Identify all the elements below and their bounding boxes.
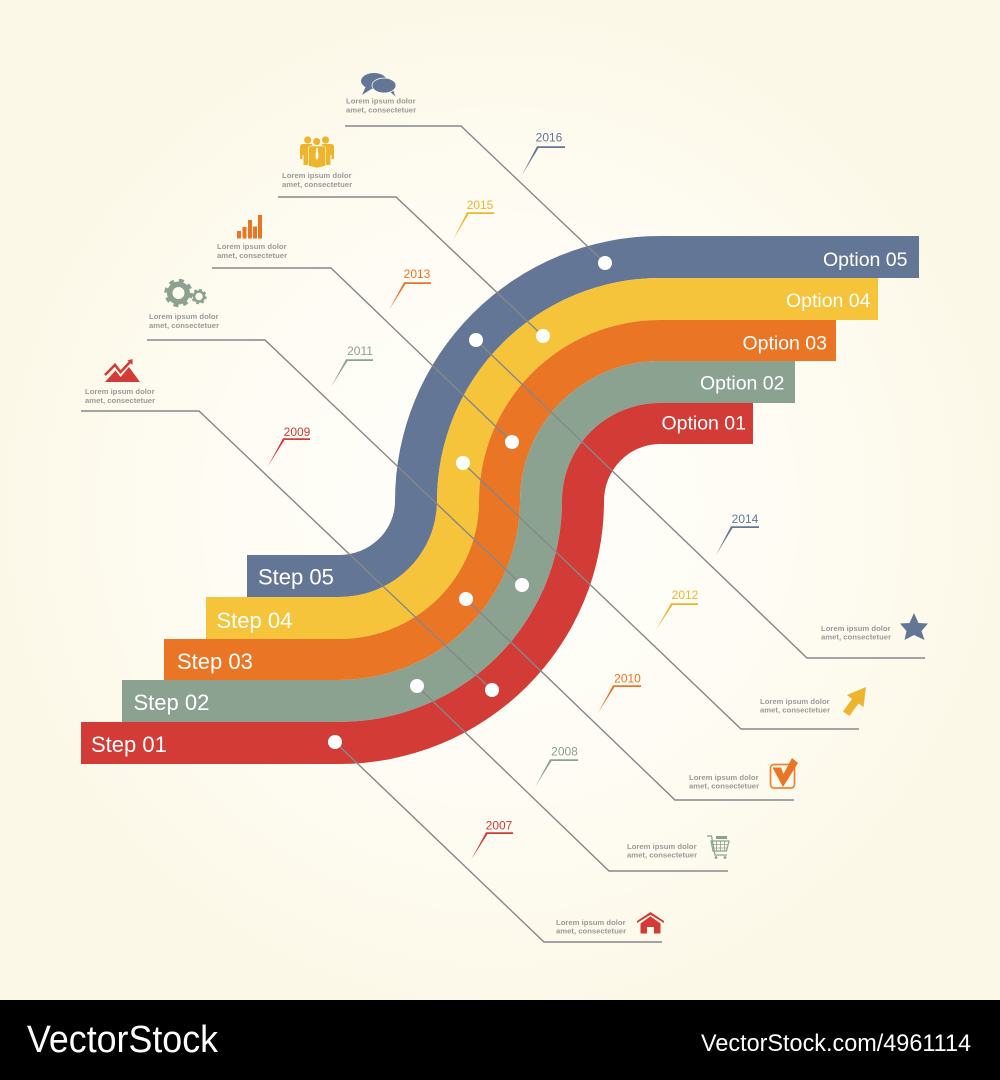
caption: checkbox: Lorem ipsum dolor <box>689 773 759 782</box>
caption: shopping cart: amet, consectetuer <box>627 851 697 860</box>
footer bar <box>0 1000 1000 1080</box>
caption: team: amet, consectetuer <box>282 180 352 189</box>
step labels: Step 02 <box>134 690 209 715</box>
ribbon: step 01 to option 01 <box>81 403 753 764</box>
year flag: 2015: 2015 <box>467 198 494 212</box>
year flag: 2011: 2011 <box>347 344 373 358</box>
year flag: 2007: 2007 <box>486 818 513 832</box>
caption: speech bubbles: amet, consectetuer <box>346 105 416 114</box>
caption: mountain trend: amet, consectetuer <box>85 396 155 405</box>
icon: shopping cart <box>707 836 729 859</box>
leader lines <box>81 126 925 942</box>
ribbon: step 04 to option 04 <box>206 278 878 639</box>
caption: bar chart: Lorem ipsum dolor <box>217 242 287 251</box>
footer brand: VectorStock <box>27 1019 219 1061</box>
caption: checkbox: amet, consectetuer <box>689 782 759 791</box>
year flag: 2008: 2008 <box>551 744 578 758</box>
year flag: 2012 <box>656 588 699 630</box>
year flag: 2011 <box>331 344 373 387</box>
year flag: 2009 <box>268 425 311 466</box>
option labels: Option 03 <box>742 332 827 354</box>
caption: house: Lorem ipsum dolor <box>556 918 626 927</box>
icon: bar chart <box>237 215 262 238</box>
step labels: Step 05 <box>258 564 334 590</box>
year flag: 2013: 2013 <box>404 267 431 281</box>
icon: house <box>637 912 664 934</box>
option labels: Option 05 <box>823 249 908 271</box>
year flag: 2007 <box>471 818 513 860</box>
option labels <box>661 249 908 434</box>
caption: star: amet, consectetuer <box>821 633 891 642</box>
footer image id: VectorStock.com/4961114 <box>701 1030 971 1057</box>
icon: star <box>900 613 928 640</box>
year flag: 2012: 2012 <box>672 588 699 602</box>
caption: bar chart: amet, consectetuer <box>217 251 287 260</box>
step labels: Step 03 <box>177 649 253 674</box>
caption: gears: Lorem ipsum dolor <box>149 312 219 321</box>
year flag: 2009: 2009 <box>284 425 311 439</box>
icon: arrow <box>843 687 866 716</box>
year flag: 2016: 2016 <box>536 130 563 144</box>
year flag: 2010 <box>598 672 641 713</box>
ribbon: step 03 to option 03 <box>164 320 836 680</box>
timeline dots <box>328 256 612 749</box>
step labels: Step 04 <box>216 608 292 633</box>
option labels: Option 01 <box>661 412 746 434</box>
ribbon: step 05 to option 05 <box>247 236 919 597</box>
year flag: 2016 <box>522 130 565 175</box>
year flag: 2010: 2010 <box>614 672 641 686</box>
year flag: 2013 <box>389 267 431 310</box>
icon: team of people <box>300 136 334 168</box>
icon: mountain trend <box>105 359 140 382</box>
caption: gears: amet, consectetuer <box>149 321 219 330</box>
option labels: Option 02 <box>700 372 784 394</box>
caption: shopping cart: Lorem ipsum dolor <box>627 842 697 851</box>
caption: star: Lorem ipsum dolor <box>821 624 891 633</box>
year flag: 2014 <box>716 512 759 555</box>
caption: house: amet, consectetuer <box>556 927 626 936</box>
year flag: 2014: 2014 <box>732 512 759 526</box>
panel: curved ribbons <box>81 236 919 764</box>
icon: checkbox <box>770 758 798 788</box>
step labels <box>91 564 334 757</box>
icon: speech bubbles <box>361 73 396 96</box>
icon: gears <box>166 280 206 306</box>
caption: arrow: amet, consectetuer <box>760 706 830 715</box>
caption: mountain trend: Lorem ipsum dolor <box>85 387 155 396</box>
year flag: 2008 <box>535 744 578 787</box>
step labels: Step 01 <box>91 732 167 757</box>
caption: speech bubbles: Lorem ipsum dolor <box>346 96 416 106</box>
caption: team: Lorem ipsum dolor <box>282 171 352 180</box>
caption: arrow: Lorem ipsum dolor <box>760 697 830 706</box>
ribbon: step 02 to option 02 <box>122 361 795 722</box>
year flag: 2015 <box>453 198 494 240</box>
option labels: Option 04 <box>786 290 871 312</box>
